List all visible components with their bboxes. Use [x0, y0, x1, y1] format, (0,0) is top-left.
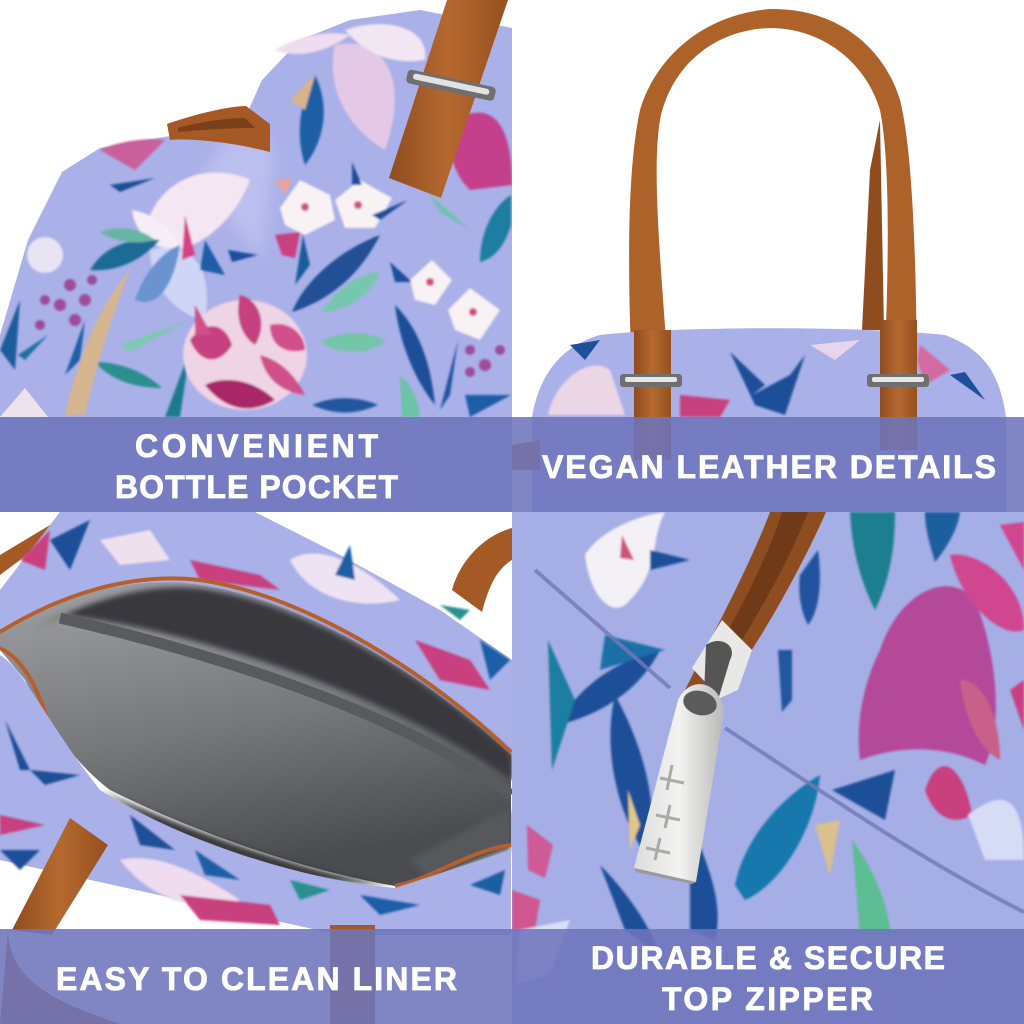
banner: vegan leather details	[512, 417, 1024, 512]
rear handle strap	[862, 120, 884, 330]
lower pink flower left	[512, 824, 570, 929]
pocket seam	[535, 570, 1024, 912]
bottom-left white gap	[0, 862, 25, 930]
bag body with floral print	[0, 10, 512, 512]
banner: convenient bottle pocket	[0, 417, 512, 512]
leather strap with buckle	[389, 0, 508, 198]
white flower	[585, 512, 690, 608]
lower fabric	[0, 655, 511, 935]
label: durable and secure: DURABLE & SECURE	[591, 940, 945, 976]
pink peony	[183, 295, 307, 410]
small white flowers	[27, 162, 500, 340]
zipper	[685, 512, 826, 690]
banner: durable and secure top zipper	[512, 929, 1024, 1024]
bag top	[532, 328, 1006, 512]
metal buckles	[620, 374, 682, 387]
panel: vegan leather	[512, 0, 1024, 512]
berries	[35, 275, 505, 377]
leaves	[0, 195, 511, 417]
panel: bottle pocket	[0, 0, 512, 512]
liner interior	[0, 582, 511, 886]
large top flower	[100, 24, 512, 192]
front leather strap	[12, 818, 108, 935]
printed blue leaves	[548, 512, 960, 955]
panel: liner	[0, 512, 512, 1024]
banner: easy to clean liner	[0, 929, 512, 1024]
pink flower	[859, 522, 1024, 860]
upper fabric rim	[0, 512, 512, 780]
label: top zipper: TOP ZIPPER	[662, 981, 873, 1017]
leather handle	[629, 9, 916, 332]
zipper pull	[634, 620, 752, 884]
rear bag strap	[167, 106, 270, 152]
label: bottle pocket: BOTTLE POCKET	[115, 469, 398, 505]
center lily flower	[90, 172, 258, 320]
label: easy to clean liner: EASY TO CLEAN LINER	[56, 961, 457, 997]
label: convenient: CONVENIENT	[135, 428, 378, 464]
panel: top zipper	[512, 512, 1024, 1024]
lower straps	[634, 330, 671, 460]
orange zipper trim	[0, 578, 511, 752]
rear handle	[452, 528, 512, 612]
label: vegan leather details: VEGAN LEATHER DETAILS	[542, 449, 996, 485]
